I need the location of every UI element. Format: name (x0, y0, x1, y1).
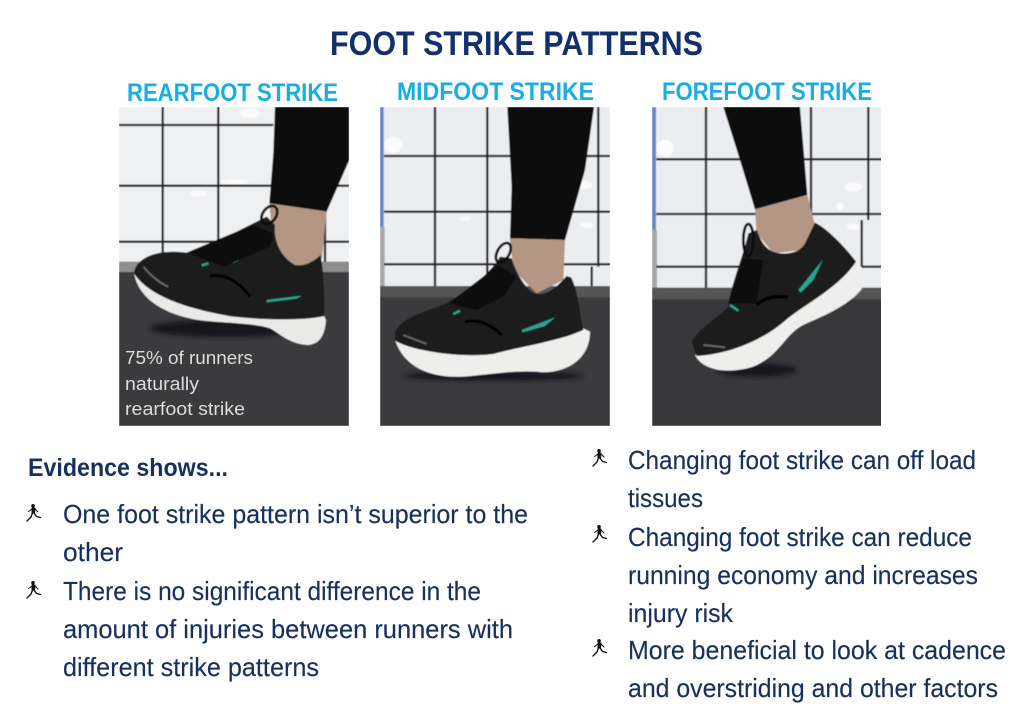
subheading: Evidence shows... (28, 454, 228, 482)
left text block: evidence shows (27, 454, 528, 682)
ankle (269, 203, 327, 270)
bullet text: injuries: different strike patterns (63, 652, 319, 682)
photo caption: 75% of runners: naturally (125, 374, 199, 394)
right text block: changing foot strike (593, 445, 1006, 703)
bullet text: off load: tissues (628, 483, 703, 513)
shoe upper (692, 223, 856, 356)
bullet text: off load (628, 445, 976, 513)
bullet text: running economy: injury risk (628, 598, 734, 628)
bullet text: running economy (628, 522, 978, 628)
icon: runner bullet (27, 581, 40, 598)
shoe upper (395, 257, 583, 355)
bullet text: off load: Changing foot strike can off load (628, 445, 976, 475)
shoe sole (395, 328, 590, 377)
shoe sole (134, 273, 326, 345)
bullet text: injuries (63, 576, 513, 682)
leg (507, 107, 594, 240)
bullet text: superiority: One foot strike pattern isn’t superior to the (63, 499, 528, 529)
icon: runner bullet (27, 504, 40, 521)
heading: midfoot strike: MIDFOOT STRIKE (397, 78, 594, 106)
title: FOOT STRIKE PATTERNS (330, 25, 703, 63)
bullet text: cadence (628, 635, 1006, 703)
photo caption: 75% of runners (125, 348, 253, 419)
photo panel: forefoot strike shoe (652, 107, 881, 426)
shoe sole (695, 261, 867, 371)
bullet text: running economy: Changing foot strike can reduce (628, 522, 972, 552)
bullet text: superiority (63, 499, 528, 567)
heading: rearfoot strike: REARFOOT STRIKE (127, 79, 338, 107)
photo caption: 75% of runners: rearfoot strike (125, 399, 245, 419)
bullet text: running economy: running economy and increases (628, 560, 978, 590)
photo panel: midfoot strike shoe (380, 107, 610, 426)
heading: forefoot strike: FOREFOOT STRIKE (662, 78, 872, 106)
icon: runner bullet (593, 525, 606, 542)
bullet text: injuries: There is no significant difference in the (63, 576, 481, 606)
shoe upper (134, 217, 324, 319)
icon: runner bullet (593, 449, 606, 466)
icon: runner bullet (593, 639, 606, 656)
photo panel: rearfoot strike shoe (119, 107, 349, 426)
bullet text: injuries: amount of injuries between runners with (63, 614, 513, 644)
bullet text: superiority: other (63, 537, 123, 567)
bullet text: cadence: More beneficial to look at cadence (628, 635, 1006, 665)
leg (723, 107, 807, 209)
bullet text: cadence: and overstriding and other factors (628, 673, 998, 703)
leg (269, 107, 349, 212)
ankle (755, 195, 815, 253)
photo caption: 75% of runners: 75% of runners (125, 348, 253, 368)
ankle (510, 238, 565, 293)
